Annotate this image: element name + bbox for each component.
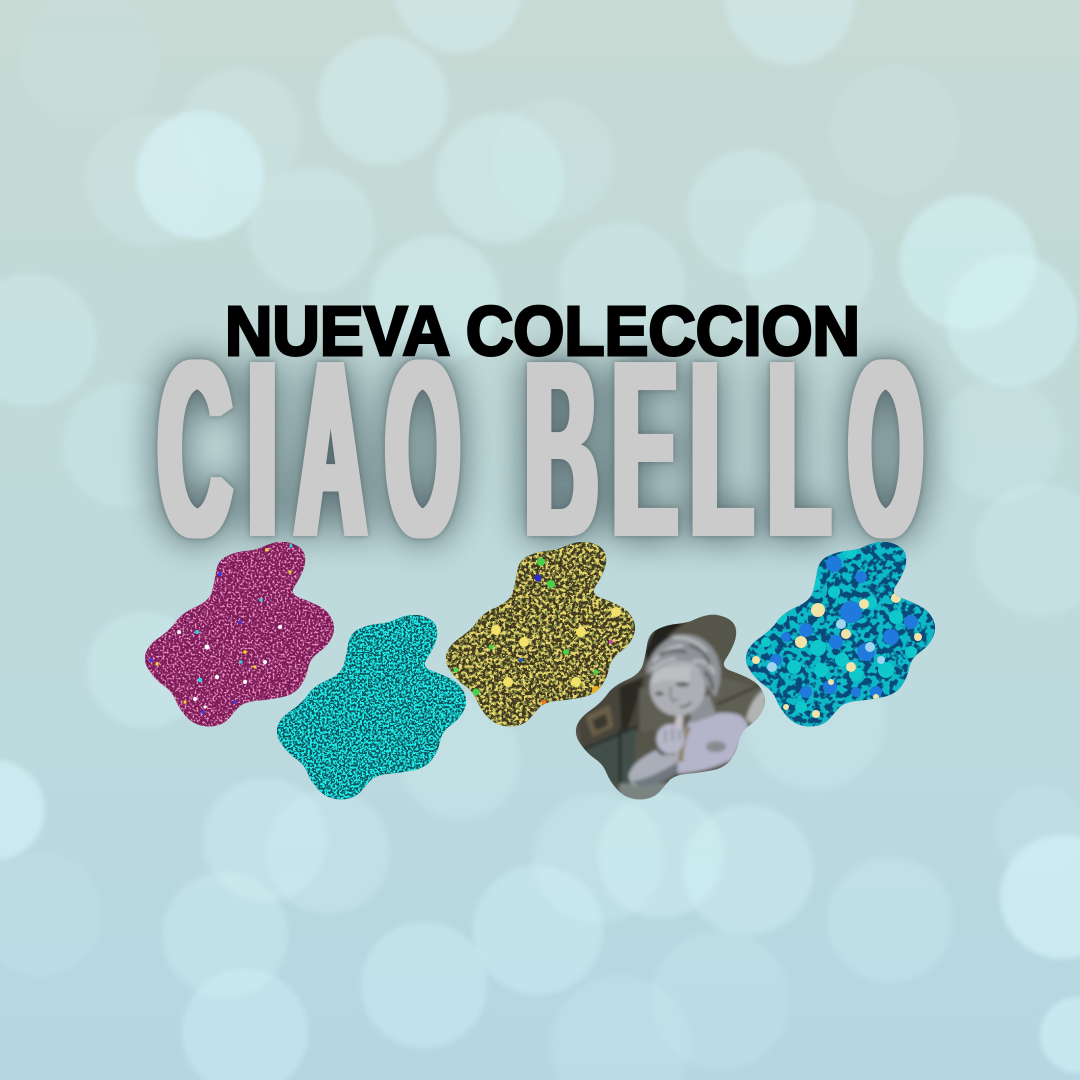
heading: NUEVA COLECCION: NUEVA COLECCION	[225, 292, 860, 370]
title: CIAO BELLO: A	[296, 306, 366, 590]
statue backdrop	[573, 612, 773, 805]
cherub head	[646, 634, 721, 716]
swatch: turquoise glitter	[277, 615, 467, 800]
title: CIAO BELLO: O	[849, 308, 922, 590]
title: CIAO BELLO: C	[158, 308, 231, 590]
swatch: pink glitter	[145, 542, 335, 727]
swatch: blue chunky glitter	[746, 542, 936, 727]
swatch: gold glitter	[446, 542, 636, 727]
title: CIAO BELLO: O	[386, 308, 459, 590]
title: CIAO BELLO: L	[691, 307, 752, 590]
title: CIAO BELLO: L	[768, 307, 830, 590]
swatch: cherub statue photo	[573, 612, 773, 805]
title: CIAO BELLO: B	[525, 307, 597, 590]
title: CIAO BELLO: I	[248, 307, 277, 590]
title: CIAO BELLO: E	[613, 307, 677, 590]
title: CIAO BELLO	[158, 306, 922, 590]
cherub body and arm	[629, 695, 748, 787]
